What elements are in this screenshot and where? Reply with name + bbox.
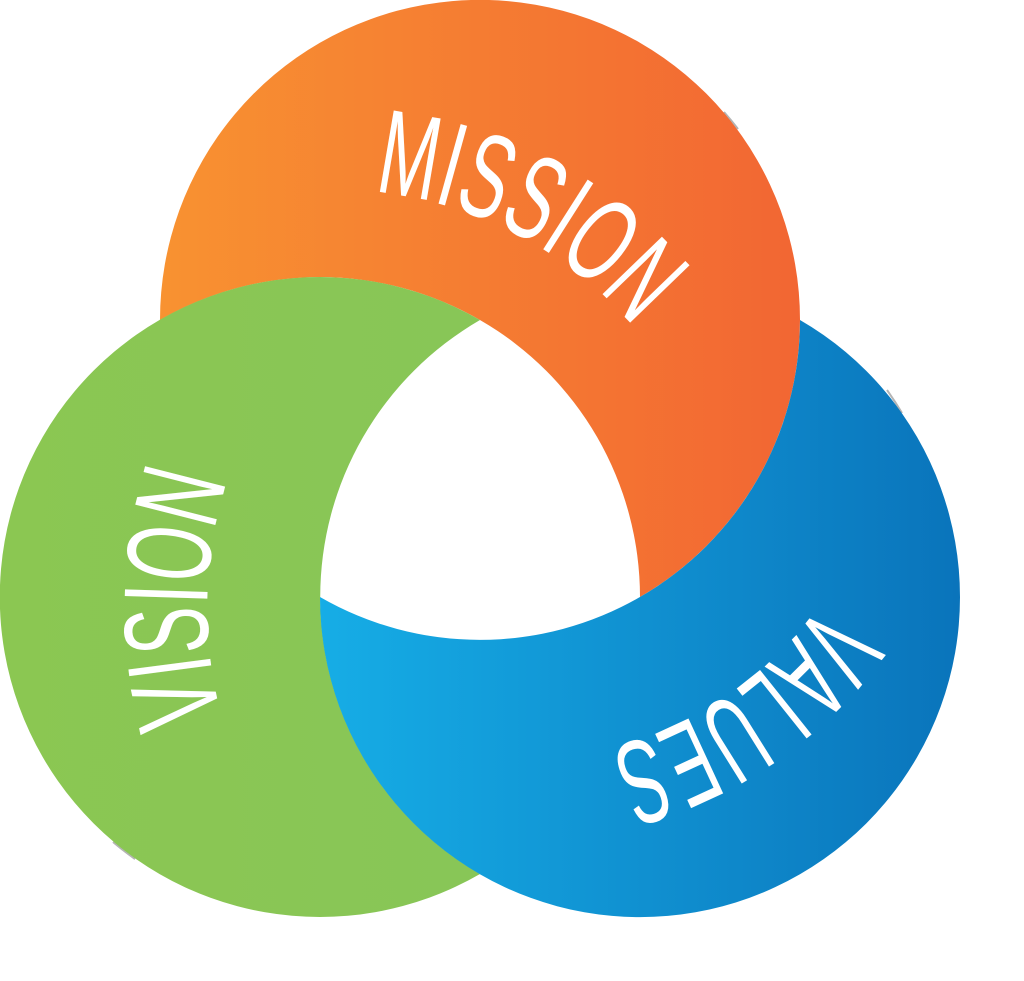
vision label: VISION — [124, 466, 226, 736]
values blue arc — [320, 320, 960, 917]
mission orange arc — [160, 0, 800, 597]
vision green arc — [0, 277, 480, 917]
values label: VALUES — [618, 618, 886, 823]
mission label: MISSION — [380, 110, 690, 323]
